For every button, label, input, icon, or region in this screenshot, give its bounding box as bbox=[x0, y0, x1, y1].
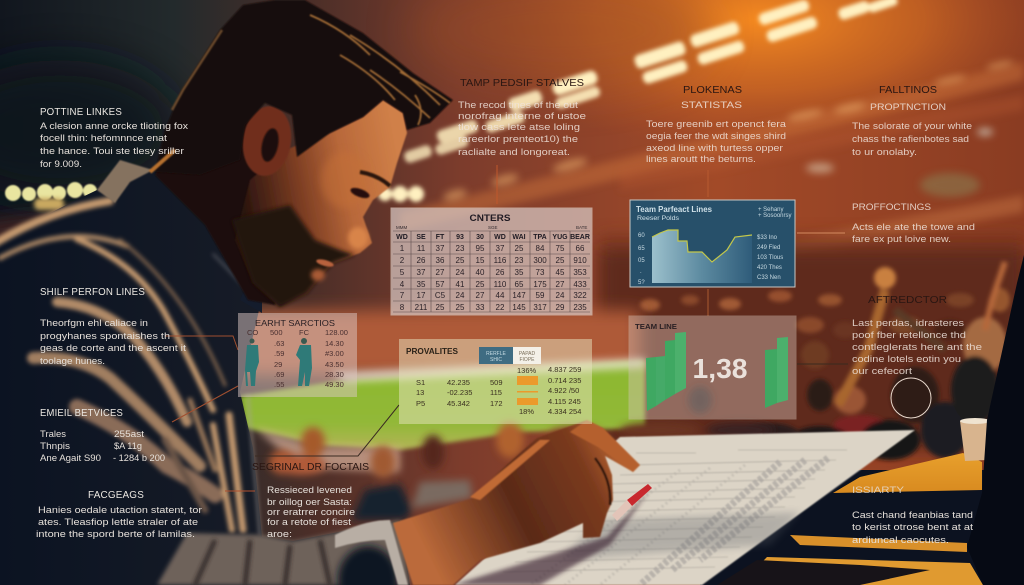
table rows: 57 bbox=[436, 280, 445, 289]
eye and brow bbox=[360, 172, 390, 186]
table header: 93 bbox=[456, 234, 464, 241]
text: plokenas statistas: PLOKENAS bbox=[683, 85, 742, 96]
text: aftredctor: AFTREDCTOR bbox=[868, 295, 947, 306]
table rows: 8 bbox=[400, 303, 405, 312]
player figure left bbox=[245, 338, 259, 386]
stats columns: FC bbox=[299, 328, 310, 337]
table rows: 23 bbox=[515, 256, 524, 265]
table rows: 17 bbox=[417, 291, 426, 300]
table rows: 25 bbox=[556, 256, 565, 265]
text: falltinos proptnction: The solorate of your white bbox=[852, 121, 972, 132]
table rows: 95 bbox=[476, 244, 485, 253]
panel: centers table: BATE bbox=[576, 225, 587, 230]
text: emieil betvices: Thnpis bbox=[40, 441, 70, 452]
text: emieil betvices: 255ast bbox=[114, 429, 144, 440]
stats columns: #3.00 bbox=[325, 349, 344, 358]
table header: BEAR bbox=[570, 234, 590, 241]
stats columns: 14.30 bbox=[325, 339, 344, 348]
stats columns: .69 bbox=[274, 370, 284, 379]
table rows: 110 bbox=[494, 280, 507, 289]
stats columns: 28.30 bbox=[325, 370, 344, 379]
stats columns: 43.50 bbox=[325, 360, 344, 369]
text: falltinos proptnction: to ur onolaby. bbox=[852, 147, 917, 158]
legend chips: PAPAD bbox=[519, 351, 535, 357]
text: aftredctor bbox=[852, 295, 982, 377]
text: seginal dr foctais: SEGRINAL DR FOCTAIS bbox=[252, 462, 369, 473]
chart values bbox=[757, 235, 783, 281]
table rows: 2 bbox=[400, 256, 405, 265]
text: tamp pedsif stalves: rareerlor prenteot10) the bbox=[458, 134, 578, 145]
man's hand bbox=[393, 420, 640, 585]
table rows: 11 bbox=[417, 244, 426, 253]
table rows: 25 bbox=[515, 244, 524, 253]
stats columns: .55 bbox=[274, 380, 284, 389]
beard bbox=[232, 205, 355, 307]
table rows: 25 bbox=[456, 303, 465, 312]
document on the table bbox=[453, 430, 915, 585]
table rows: 66 bbox=[576, 244, 585, 253]
table values: P5 bbox=[416, 399, 425, 408]
table header: WD bbox=[494, 234, 506, 241]
red pen bbox=[612, 484, 652, 521]
table header: WAI bbox=[512, 234, 526, 241]
text: tamp pedsif stalves: The recod tines of the out bbox=[458, 100, 578, 111]
table rows: 23 bbox=[456, 244, 465, 253]
text: falltinos proptnction: FALLTINOS bbox=[879, 85, 937, 96]
man's head bbox=[150, 0, 453, 307]
panel: centers table: MMM bbox=[396, 225, 407, 230]
table rows: 322 bbox=[573, 291, 587, 300]
stadium lights bbox=[378, 0, 899, 202]
text: pottine linkes: for 9.009. bbox=[40, 159, 82, 170]
stats columns: 29 bbox=[274, 360, 282, 369]
chart legend: + Sosoonrsy bbox=[758, 213, 792, 219]
table rows: 25 bbox=[456, 256, 465, 265]
table values: 0.714 235 bbox=[548, 376, 581, 385]
text: plokenas statistas bbox=[646, 85, 787, 165]
text: plokenas statistas: axeod line with turtess opper bbox=[646, 143, 783, 154]
table rows: 24 bbox=[456, 268, 465, 277]
text: aftredctor: Last perdas, idrasteres bbox=[852, 318, 964, 329]
table values: 42.235 bbox=[447, 378, 470, 387]
text: proffoctings bbox=[852, 202, 975, 245]
text: seginal dr foctais: orr eratrrer concire bbox=[267, 507, 355, 518]
text: tamp pedsif stalves: norofrag interne of ustoe bbox=[458, 111, 586, 122]
panel: team perfect lines chart: Reeser Polds bbox=[637, 215, 680, 222]
text: tamp pedsif stalves: raclialte and longoreat. bbox=[458, 147, 570, 158]
connector lines bbox=[165, 165, 848, 491]
balcony lights bbox=[442, 59, 1014, 203]
text: seginal dr foctais: for a retote of fiest bbox=[267, 517, 351, 528]
text: emieil betvices bbox=[40, 408, 165, 464]
stats columns bbox=[247, 328, 348, 389]
table rows: 37 bbox=[417, 268, 426, 277]
table header: TPA bbox=[533, 234, 547, 241]
table header: 30 bbox=[476, 234, 484, 241]
circle marker bbox=[891, 378, 931, 418]
chart axis labels: 65 bbox=[638, 246, 645, 252]
text: falltinos proptnction: chass the rafienbotes sad bbox=[852, 134, 969, 145]
table rows: 44 bbox=[496, 291, 505, 300]
text: aftredctor: our cefecort bbox=[852, 366, 912, 377]
table values: 45.342 bbox=[447, 399, 470, 408]
orange bars bbox=[517, 376, 538, 405]
panel heading: PROVALITES bbox=[406, 347, 459, 356]
text: shilf perfon lines: toolage hunes. bbox=[40, 356, 105, 367]
table values: 4.115 245 bbox=[548, 397, 581, 406]
sleeve cuff interior bbox=[338, 546, 398, 585]
table rows: 211 bbox=[415, 303, 428, 312]
coffee cup bbox=[960, 418, 990, 461]
text: issiarty bbox=[852, 485, 973, 546]
cheek light bbox=[321, 152, 369, 208]
text: proffoctings: Acts ele ate the towe and bbox=[852, 222, 975, 233]
text: issiarty: ardiuncal caocutes. bbox=[852, 535, 949, 546]
table rows: 24 bbox=[456, 291, 465, 300]
text: seginal dr foctais: br oillog oer Sasta: bbox=[267, 497, 352, 508]
table rows: 27 bbox=[476, 291, 485, 300]
green bars left bbox=[646, 332, 686, 411]
table rows: 33 bbox=[476, 303, 485, 312]
legend chips bbox=[479, 347, 541, 364]
text: facgeags bbox=[36, 490, 202, 540]
text: seginal dr foctais bbox=[252, 462, 369, 540]
text: tamp pedsif stalves bbox=[458, 78, 586, 158]
text: tamp pedsif stalves: tlow cass lete atse loling bbox=[458, 122, 580, 133]
table rows: C5 bbox=[435, 291, 446, 300]
table values: 172 bbox=[490, 399, 503, 408]
table rows: 7 bbox=[400, 291, 405, 300]
panel: team perfect lines chart bbox=[630, 200, 795, 287]
chart values: 249 Fled bbox=[757, 245, 780, 251]
shirt highlights bbox=[0, 201, 260, 535]
stats columns: 128.00 bbox=[325, 328, 348, 337]
text: facgeags: intone the spord berte of lamilas. bbox=[36, 529, 195, 540]
text: aftredctor: poof fber retellonce thd bbox=[852, 330, 966, 341]
text: emieil betvices: EMIEIL BETVICES bbox=[40, 408, 123, 419]
table rows: 26 bbox=[496, 268, 505, 277]
panel: probalites bbox=[399, 339, 592, 424]
text: proffoctings: fare ex put loive new. bbox=[852, 234, 951, 245]
chart axis labels bbox=[638, 233, 645, 286]
text: tamp pedsif stalves: TAMP PEDSIF STALVES bbox=[460, 78, 584, 89]
text: plokenas statistas: Toere greenib ert openct fera bbox=[646, 119, 787, 130]
table values bbox=[416, 365, 581, 416]
text: facgeags: Hanies oedale utaction statent, tor bbox=[38, 505, 202, 516]
table values: 4.837 259 bbox=[548, 365, 581, 374]
chart legend: + Sehany bbox=[758, 207, 784, 213]
text: pottine linkes: the hance. Toui ste tlesy sriller bbox=[40, 146, 184, 157]
table values: -02.235 bbox=[447, 388, 472, 397]
table rows: 84 bbox=[536, 244, 545, 253]
green bars right bbox=[765, 337, 788, 408]
table rows: 353 bbox=[573, 268, 587, 277]
panel heading: EARHT SARCTIOS bbox=[255, 318, 335, 328]
table rows: 27 bbox=[556, 280, 565, 289]
panel: centers table: SGE bbox=[488, 225, 498, 230]
text: seginal dr foctais: Ressieced levened bbox=[267, 485, 352, 496]
table rows: 300 bbox=[533, 256, 547, 265]
text: aftredctor: contleglerats here ant the bbox=[852, 342, 982, 353]
table rows: 433 bbox=[573, 280, 587, 289]
panel heading: TEAM LINE bbox=[635, 324, 677, 331]
text: pottine linkes: focell thin: hefomnnce enat bbox=[40, 133, 167, 144]
panel: centers table bbox=[391, 208, 592, 315]
text: issiarty: Cast chand feanbias tand bbox=[852, 510, 973, 521]
stats columns: CO bbox=[247, 328, 258, 337]
table rows: 145 bbox=[512, 303, 526, 312]
table rows: 37 bbox=[436, 244, 445, 253]
chart axis labels: 5? bbox=[638, 280, 645, 286]
table rows: 73 bbox=[536, 268, 545, 277]
table rows: 235 bbox=[573, 303, 587, 312]
chart axis labels: . bbox=[640, 269, 642, 275]
table values: 136% bbox=[517, 366, 537, 375]
text: shilf perfon lines: progyhanes spontaishes th bbox=[40, 331, 170, 342]
chart values: 103 Tlous bbox=[757, 255, 783, 261]
crowd bbox=[600, 250, 1024, 460]
table rows: 36 bbox=[436, 256, 445, 265]
text: plokenas statistas: lines aroutt the beturns. bbox=[646, 154, 756, 165]
text: issiarty: ISSIARTY bbox=[852, 485, 905, 496]
text: seginal dr foctais: aroe: bbox=[267, 529, 292, 540]
table rows: 5 bbox=[400, 268, 405, 277]
table rows: 26 bbox=[417, 256, 426, 265]
stats columns: .59 bbox=[274, 349, 284, 358]
table rows: 175 bbox=[533, 280, 547, 289]
text: aftredctor: codine lotels eotin you bbox=[852, 354, 961, 365]
text: plokenas statistas: oegia feer the wdt singes shird bbox=[646, 131, 786, 142]
hair bbox=[155, 0, 453, 175]
table header: FT bbox=[436, 234, 445, 241]
face bbox=[235, 100, 407, 307]
panel: team line bbox=[629, 316, 796, 419]
table bbox=[700, 453, 985, 585]
text: issiarty: to kerist otrose bent at at bbox=[852, 522, 973, 533]
table rows: 22 bbox=[496, 303, 505, 312]
chart legend bbox=[758, 207, 792, 219]
collar bbox=[97, 160, 153, 203]
table rows: 147 bbox=[512, 291, 526, 300]
text: emieil betvices: $A 11g bbox=[114, 441, 142, 452]
table rows: 59 bbox=[536, 291, 545, 300]
text: falltinos proptnction: PROPTNCTION bbox=[870, 102, 946, 113]
table rows: 65 bbox=[515, 280, 524, 289]
text: facgeags: ates. Tleasfiop lettle straler of ate bbox=[38, 517, 198, 528]
text: emieil betvices: Ane Agait S90 bbox=[40, 453, 101, 464]
table rows: 75 bbox=[556, 244, 565, 253]
stats columns: 500 bbox=[270, 328, 283, 337]
text: shilf perfon lines: SHILF PERFON LINES bbox=[40, 287, 145, 298]
foreground spectators bbox=[269, 386, 774, 520]
table rows: 25 bbox=[436, 303, 445, 312]
legend chips: FIOPE bbox=[519, 357, 535, 363]
table rows: 35 bbox=[417, 280, 426, 289]
football pitch bbox=[240, 310, 645, 472]
table values: 509 bbox=[490, 378, 503, 387]
stats columns: 49.30 bbox=[325, 380, 344, 389]
table rows: 45 bbox=[556, 268, 565, 277]
lower sleeve bbox=[157, 520, 410, 585]
table rows: 41 bbox=[456, 280, 465, 289]
text: proffoctings: PROFFOCTINGS bbox=[852, 202, 931, 213]
chart values: 420 Thes bbox=[757, 265, 782, 271]
area chart bbox=[652, 230, 752, 283]
table rows bbox=[400, 244, 587, 312]
legend chips: SHIC bbox=[490, 357, 502, 363]
data table on document bbox=[503, 450, 847, 585]
ear bbox=[238, 103, 296, 179]
table rows: 24 bbox=[556, 291, 565, 300]
chart axis labels: 05 bbox=[638, 258, 645, 264]
text: shilf perfon lines bbox=[40, 287, 186, 367]
panel: early sarctios bbox=[238, 313, 357, 397]
table values: 13 bbox=[416, 388, 424, 397]
text: emieil betvices: - 1284 b 200 bbox=[113, 453, 165, 464]
text: falltinos proptnction bbox=[852, 85, 972, 158]
chart values: C33 Nen bbox=[757, 275, 781, 281]
text: plokenas statistas: STATISTAS bbox=[681, 100, 742, 111]
man's shirt bbox=[0, 160, 410, 585]
table values: 4.922 /50 bbox=[548, 386, 579, 395]
table rows: 317 bbox=[533, 303, 547, 312]
table values: 115 bbox=[490, 388, 502, 397]
table values: S1 bbox=[416, 378, 425, 387]
text: shilf perfon lines: Theorfgm ehl caliace in bbox=[40, 318, 148, 329]
neck and back of head bbox=[155, 110, 300, 305]
text: facgeags: FACGEAGS bbox=[88, 490, 144, 501]
player figure right bbox=[296, 338, 312, 386]
chart title: Team Parfeact Lines bbox=[636, 205, 713, 214]
left stadium lights bbox=[5, 182, 97, 210]
text: shilf perfon lines: geas de corte and the ascent it bbox=[40, 343, 186, 354]
table rows: 1 bbox=[400, 244, 405, 253]
table rows: 15 bbox=[476, 256, 485, 265]
table title: CNTERS bbox=[470, 213, 510, 224]
laptop bbox=[967, 255, 1024, 585]
table values: 18% bbox=[519, 407, 534, 416]
table rows: 25 bbox=[476, 280, 485, 289]
table header: WD bbox=[396, 234, 408, 241]
table rows: 37 bbox=[496, 244, 505, 253]
legend chips: RERFLE bbox=[486, 351, 507, 357]
text: pottine linkes: POTTINE LINKES bbox=[40, 107, 122, 118]
table rows: 910 bbox=[573, 256, 587, 265]
text: pottine linkes bbox=[40, 107, 188, 170]
nose and lips bbox=[348, 227, 368, 249]
big number: 1,38 bbox=[692, 353, 748, 384]
table rows: 40 bbox=[476, 268, 485, 277]
stats columns: .63 bbox=[274, 339, 284, 348]
table rows: 116 bbox=[494, 256, 507, 265]
text: pottine linkes: A clesion anne orcke tlioting fox bbox=[40, 121, 188, 132]
table values: 4.334 254 bbox=[548, 407, 581, 416]
table rows: 35 bbox=[515, 268, 524, 277]
table header: SE bbox=[416, 234, 426, 241]
chart axis labels: 60 bbox=[638, 233, 645, 239]
chart values: $33 Ino bbox=[757, 235, 778, 241]
table rows: 27 bbox=[436, 268, 445, 277]
table header: YUG bbox=[552, 234, 568, 241]
sleeve cuff bbox=[335, 520, 408, 585]
text: emieil betvices: Trales bbox=[40, 429, 66, 440]
table rows: 29 bbox=[556, 303, 565, 312]
table header bbox=[396, 234, 590, 241]
table rows: 4 bbox=[400, 280, 405, 289]
